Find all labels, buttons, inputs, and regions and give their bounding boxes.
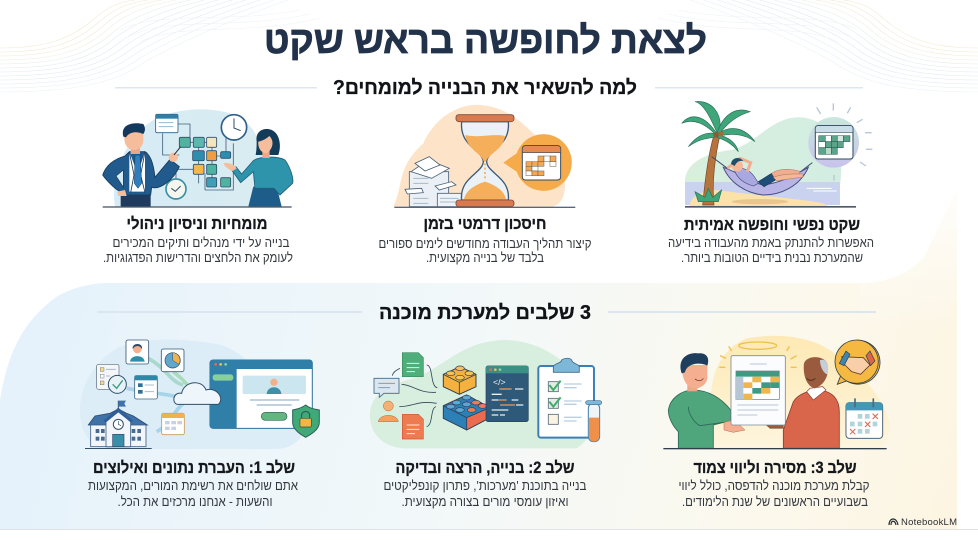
bottom divider (0, 529, 978, 530)
description: אתם שולחים את רשימת המורים, המקצועות (88, 478, 298, 493)
panel: lower steps background (0, 190, 958, 529)
icon: hammock under palm with calendar (682, 102, 872, 208)
description (88, 478, 298, 509)
description (668, 235, 874, 265)
description: והשעות - אנחנו מרכזים את הכל. (118, 494, 272, 509)
panel: expertise (103, 109, 293, 265)
panel: peace of mind (668, 102, 874, 265)
description: בנייה על ידי מנהלים ותיקים המכירים (112, 235, 290, 250)
icon: lego blocks, code window and checklist (370, 340, 602, 448)
title: לצאת לחופשה בראש שקט (264, 20, 707, 62)
description: בנייה בתוכנת 'מערכות', פתרון קונפליקטים (384, 478, 587, 493)
description: האפשרות להתנתק באמת מהעבודה בידיעה (668, 235, 874, 250)
description: קבלת מערכת מוכנה להדפסה, כולל ליווי (678, 478, 870, 493)
panel: step 3 handover (663, 336, 889, 509)
icon: two managers and flowchart (103, 109, 293, 208)
description (103, 235, 293, 265)
icon: hourglass with papers and calendar (393, 105, 575, 208)
section heading: three steps: 3 שלבים למערכת מוכנה (379, 302, 591, 324)
heading: חיסכון דרמטי בזמן (424, 215, 546, 233)
description (384, 478, 587, 509)
heading: מומחיות וניסיון ניהולי (126, 215, 268, 233)
description: בשבועיים הראשונים של שנת הלימודים. (682, 494, 868, 509)
background contour lines (0, 0, 978, 92)
icon: handover of finished timetable (663, 336, 889, 449)
panel: step 1 data transfer (80, 340, 319, 509)
section heading: why leave it to experts: למה להשאיר את הבנייה למומחים? (333, 77, 637, 99)
description (678, 478, 870, 509)
notebooklm watermark: NotebookLM (901, 517, 957, 528)
description: לעומק את הלחצים והדרישות הפדגוגיות. (103, 250, 293, 265)
panel: dramatic time saving (378, 105, 592, 265)
description: קיצור תהליך העבודה מחודשים לימים ספורים (378, 236, 592, 251)
icon: lego blocks, code window and checklist: </> (493, 377, 506, 387)
heading: שלב 1: העברת נתונים ואילוצים (93, 459, 295, 477)
heading: שקט נפשי וחופשה אמיתית (684, 216, 860, 234)
heading: שלב 3: מסירה וליווי צמוד (694, 459, 856, 477)
description (378, 236, 592, 265)
description: בלבד של בנייה מקצועית. (426, 250, 544, 265)
description: ואיזון עומסי מורים בצורה מקצועית. (402, 494, 568, 509)
heading: שלב 2: בנייה, הרצה ובדיקה (396, 459, 574, 477)
description: שהמערכת נבנית בידיים הטובות ביותר. (681, 250, 863, 265)
panel: step 2 build and test (370, 340, 602, 509)
icon: school, cloud and secure system (80, 340, 319, 449)
